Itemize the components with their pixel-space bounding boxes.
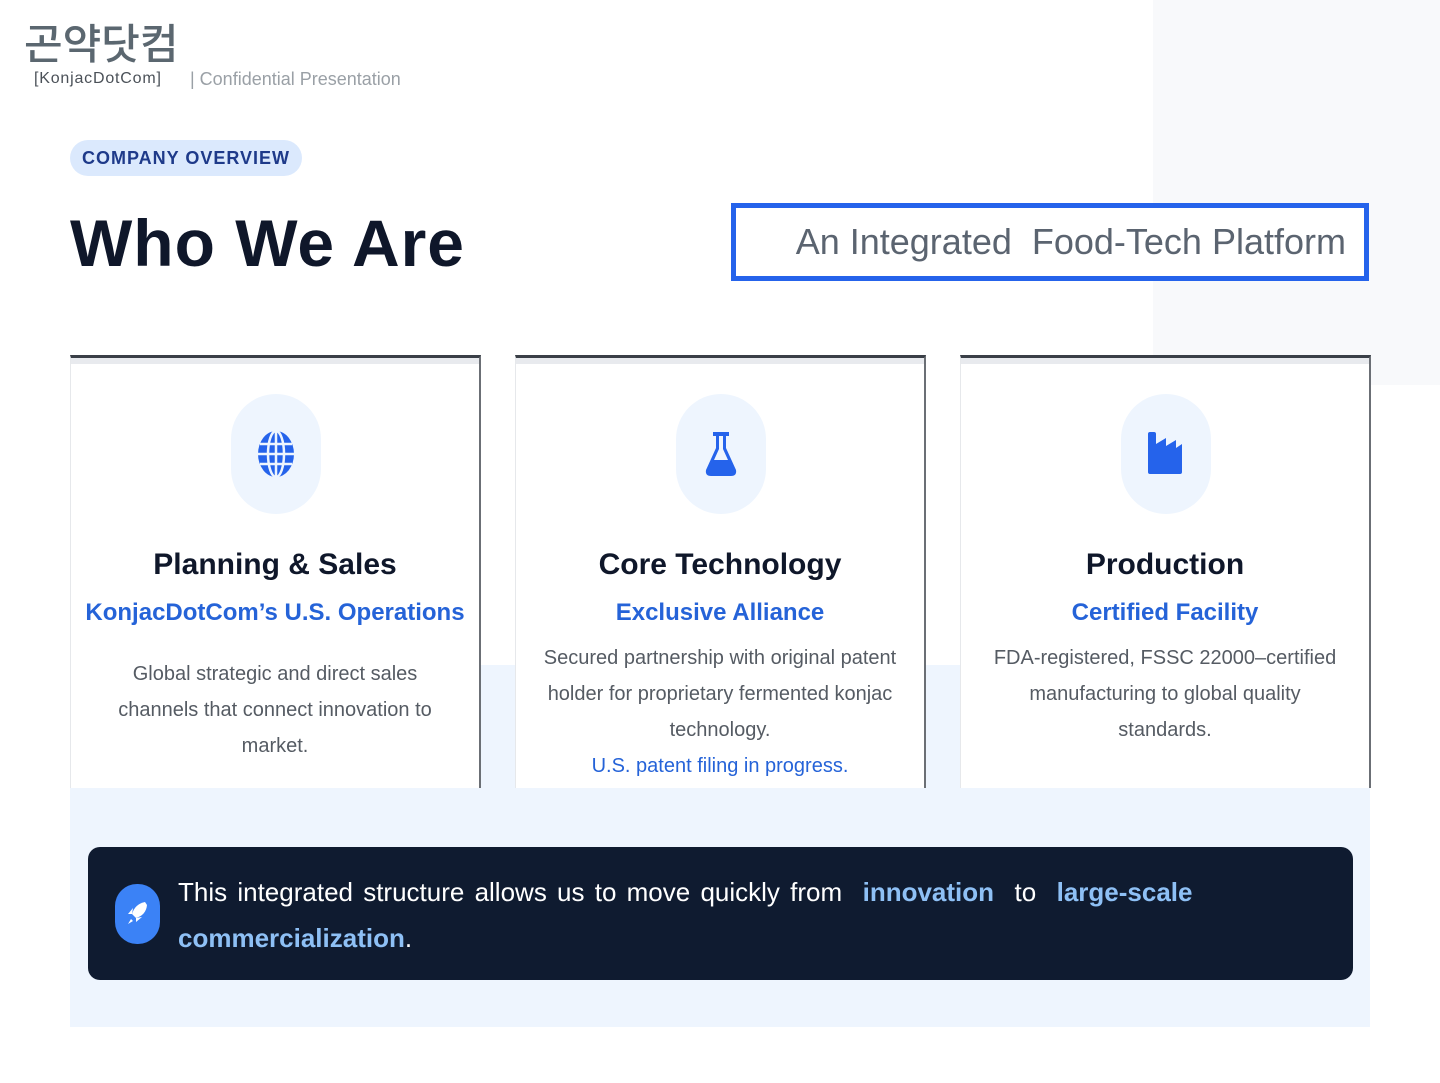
background: top right panel xyxy=(1153,0,1440,385)
card: production: FDA-registered, FSSC 22000–certified manufacturing to global quality standards. xyxy=(994,647,1336,741)
background: lower light blue panel xyxy=(70,665,1370,1027)
card: planning & sales: Planning & Sales xyxy=(153,548,397,581)
card: production: Production xyxy=(1086,548,1244,581)
card: core technology: U.S. patent filing in progress. xyxy=(592,755,848,777)
callout text: This integrated structure allows us to move quickly from innovation to large-scale commercialization. xyxy=(178,877,1192,953)
icon: rocket xyxy=(115,884,160,944)
title: Who We Are xyxy=(70,206,465,280)
card: production xyxy=(960,355,1371,788)
badge: COMPANY OVERVIEW xyxy=(82,148,290,168)
callout bar xyxy=(88,847,1353,980)
icon: flask xyxy=(676,394,766,514)
card: core technology xyxy=(515,355,926,788)
card: production: Certified Facility xyxy=(1072,599,1258,626)
card: planning & sales: Global strategic and direct sales channels that connect innovation to market. xyxy=(118,663,432,757)
icon: factory xyxy=(1121,394,1211,514)
badge xyxy=(70,140,302,176)
header subtitle: | Confidential Presentation xyxy=(190,69,401,89)
logo: 곤약닷컴 xyxy=(24,11,179,72)
card: core technology: Core Technology xyxy=(599,548,841,581)
card: core technology: Secured partnership with original patent holder for proprietary fermented konjac technology. xyxy=(544,647,896,741)
card: planning & sales xyxy=(70,355,481,788)
tagline box: An Integrated Food-Tech Platform xyxy=(796,221,1346,262)
icon: globe xyxy=(231,394,321,514)
card: core technology: Exclusive Alliance xyxy=(616,599,824,626)
card: planning & sales: KonjacDotCom’s U.S. Operations xyxy=(85,599,465,626)
tagline box xyxy=(731,203,1369,281)
logo: [KonjacDotCom] xyxy=(34,70,162,87)
